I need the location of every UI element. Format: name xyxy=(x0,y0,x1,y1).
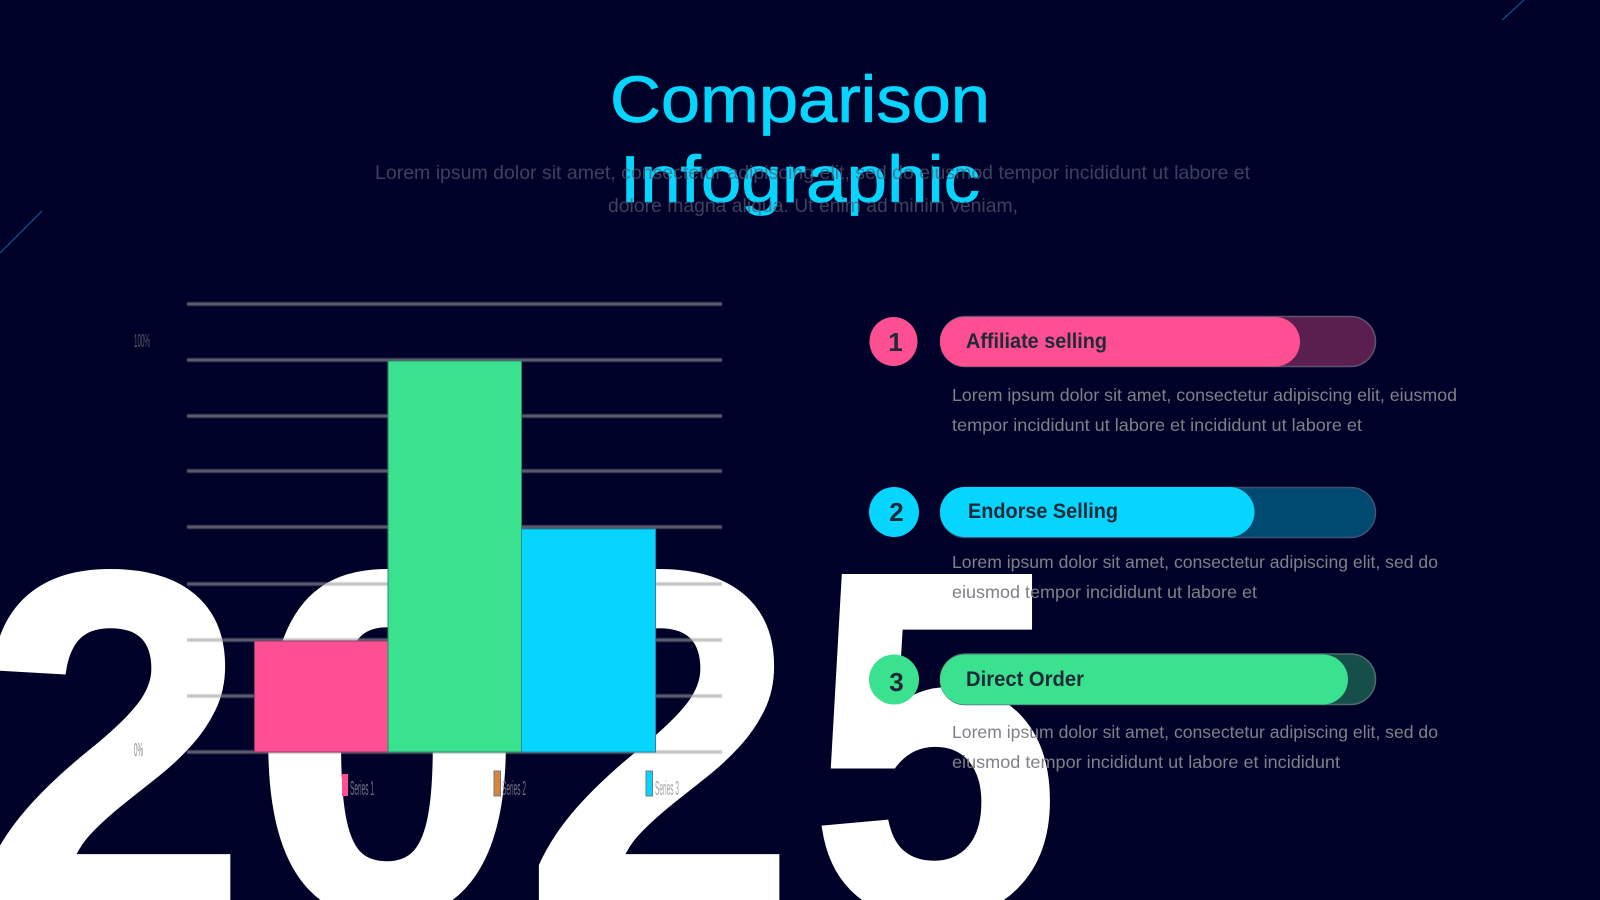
progress pill 1: Affiliate selling xyxy=(966,330,1107,353)
description 2 xyxy=(952,552,1438,602)
decorative accent: left diagonal line xyxy=(0,211,42,253)
item 3: direct order xyxy=(869,654,1438,772)
description 1: tempor incididunt ut labore et incididunt ut labore et xyxy=(952,415,1362,435)
subtitle xyxy=(375,162,1251,217)
description 1 xyxy=(952,385,1457,435)
bar chart: 0% xyxy=(134,740,143,760)
item 2: endorse selling xyxy=(869,487,1438,602)
bar chart: Series 1 xyxy=(350,778,374,800)
subtitle: dolore magna aliqua. Ut enim ad minim veniam, xyxy=(608,195,1018,217)
subtitle: Lorem ipsum dolor sit amet, consectetur adipiscing elit, sed do eiusmod tempor incididunt ut labore et xyxy=(375,162,1251,184)
number badge 1 xyxy=(870,317,918,366)
decorative accent: top right diagonal line xyxy=(1502,0,1524,20)
description 3: eiusmod tempor incididunt ut labore et incididunt xyxy=(952,752,1340,772)
legend: series 3 xyxy=(646,771,679,800)
title xyxy=(610,62,990,216)
number badge 1: 1 xyxy=(888,327,903,357)
item 1: affiliate selling xyxy=(870,316,1457,435)
number badge 2 xyxy=(869,487,919,537)
legend: series 1 xyxy=(342,774,374,800)
progress pill 3 xyxy=(940,654,1376,704)
progress pill 3: Direct Order xyxy=(966,668,1084,691)
description 3 xyxy=(952,722,1438,772)
progress pill 2: Endorse Selling xyxy=(968,500,1118,523)
bar chart: Series 3 xyxy=(655,778,679,800)
description 3: Lorem ipsum dolor sit amet, consectetur adipiscing elit, sed do xyxy=(952,722,1438,742)
bar chart xyxy=(134,304,722,800)
bar chart: Series 2 xyxy=(502,778,526,800)
chart gridlines xyxy=(187,304,722,752)
bar: series 3 cyan xyxy=(522,529,656,752)
description 2: Lorem ipsum dolor sit amet, consectetur adipiscing elit, sed do xyxy=(952,552,1438,572)
progress pill 1 xyxy=(940,316,1376,366)
title: Comparison xyxy=(610,62,990,136)
progress pill 2 xyxy=(940,487,1376,538)
number badge 3 xyxy=(869,654,919,704)
title: Infographic xyxy=(620,142,980,216)
number badge 2: 2 xyxy=(889,497,904,527)
description 1: Lorem ipsum dolor sit amet, consectetur adipiscing elit, eiusmod xyxy=(952,385,1457,405)
legend: series 2 xyxy=(494,771,526,800)
bar: series 2 green xyxy=(388,361,522,752)
bar chart: 100% xyxy=(134,331,150,351)
number badge 3: 3 xyxy=(889,667,904,697)
description 2: eiusmod tempor incididunt ut labore et xyxy=(952,582,1257,602)
big year number 2025 xyxy=(0,472,1060,900)
bar: series 1 pink xyxy=(254,641,388,752)
